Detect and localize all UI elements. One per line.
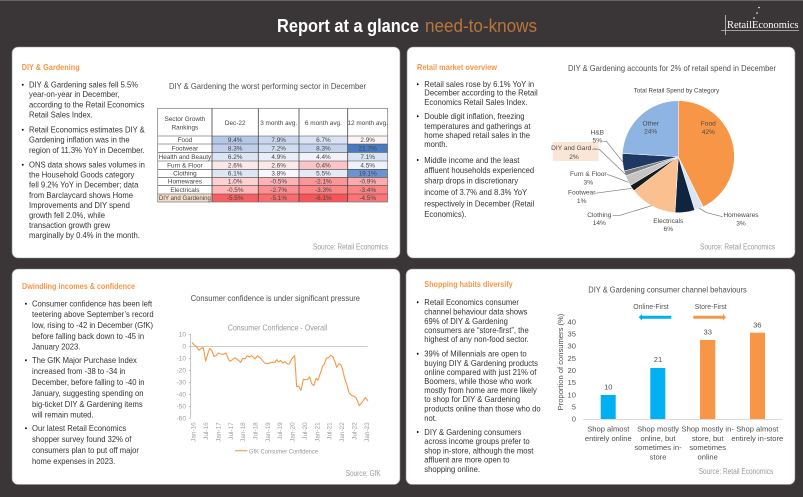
- table: sector growth rankings: 7.2%: [271, 145, 286, 152]
- text block: confidence bullets: teetering above September’s record: [32, 310, 154, 319]
- text block: DIY & Gardening bullets: growth fell 2.0%, while: [29, 210, 105, 220]
- line chart: GfK consumer confidence: -30: [176, 380, 186, 387]
- pie chart: total retail spend by category: 24%: [644, 128, 657, 136]
- text block: shopping habits bullets: channel behaviour data shows: [424, 307, 528, 317]
- table: sector growth rankings: -3.4%: [359, 187, 376, 194]
- table: sector growth rankings: 19.1%: [359, 170, 377, 178]
- text block: shopping habits bullets: DIY & Gardening consumers: [424, 427, 521, 437]
- table: sector growth rankings: Homewares: [168, 179, 202, 186]
- text block: shopping habits bullets: shop in-store, although the most: [424, 446, 534, 456]
- bar chart: channel behaviours: store, but: [692, 434, 724, 443]
- text block: confidence bullets: The GfK Major Purchase Index: [32, 356, 137, 365]
- line chart: GfK consumer confidence: Jul-18: [252, 422, 260, 440]
- text block: retail market bullets: home shaped retail sales in the: [424, 131, 530, 140]
- heading: Dwindling incomes & confidence: Dwindling incomes & confidence: [22, 281, 135, 291]
- line chart: GfK consumer confidence: -50: [176, 404, 186, 411]
- pie chart: total retail spend by category: 2%: [569, 154, 579, 161]
- text block: DIY & Gardening bullets: from Barclaycard shows Home: [29, 190, 133, 200]
- text block: confidence bullets: [25, 299, 154, 466]
- heading: DIY & Gardening: DIY & Gardening: [22, 62, 80, 72]
- text block: DIY & Gardening bullets: the Household Goods category: [29, 170, 135, 180]
- bar chart: channel behaviours: entirely in-store: [731, 434, 783, 443]
- table: sector growth rankings: 8.3%: [316, 145, 331, 152]
- text block: shopping habits bullets: highest of any non-food sector.: [424, 335, 529, 344]
- logo: Retail Economics: [721, 7, 799, 35]
- logo: Retail Economics: RetailEconomics: [727, 19, 798, 31]
- bar chart: channel behaviours: 30: [568, 342, 576, 351]
- text block: DIY & Gardening bullets: ONS data shows sales volumes in: [29, 160, 145, 170]
- text block: shopping habits bullets: 69% of DIY & Gardening: [424, 316, 508, 326]
- text block: confidence bullets: before falling back down to -45 in: [32, 331, 144, 341]
- heading: Shopping habits diversify: Shopping habits diversify: [424, 279, 513, 289]
- text block: confidence bullets: consumers plan to put off major: [32, 445, 139, 455]
- table: sector growth rankings: 4.9%: [271, 154, 286, 161]
- bar chart: channel behaviours: 33: [703, 327, 712, 336]
- table: sector growth rankings: 9.4%: [228, 137, 243, 144]
- table: sector growth rankings: Footwear: [172, 145, 199, 152]
- table: sector growth rankings: Rankings: [172, 124, 198, 132]
- table: sector growth rankings: -0.5%: [227, 187, 244, 194]
- text block: shopping habits bullets: buying DIY & Gardening products: [424, 358, 538, 368]
- text block: shopping habits bullets: [417, 298, 541, 474]
- pie chart: total retail spend by category: 14%: [593, 220, 606, 227]
- table: sector growth rankings: -3.3%: [315, 187, 332, 194]
- text block: DIY & Gardening bullets: DIY & Gardening sales fell 5.5%: [29, 80, 138, 90]
- bar chart: channel behaviours: Shop almost: [736, 425, 779, 434]
- bar chart: channel behaviours: 10: [568, 390, 576, 399]
- table: sector growth rankings: 7.9%: [271, 137, 286, 144]
- bar chart: channel behaviours: 35: [568, 330, 576, 338]
- text block: retail market bullets: month.: [424, 140, 448, 149]
- text block: shopping habits bullets: Retail Economics consumer: [424, 298, 519, 307]
- pie chart: total retail spend by category: DIY and Gard...: [551, 145, 597, 152]
- table: sector growth rankings: Clothing: [173, 170, 197, 178]
- text block: DIY & Gardening bullets: year-on-year in December,: [29, 90, 119, 99]
- pie chart: total retail spend by category: Homewares: [723, 212, 759, 219]
- bar chart: channel behaviours: sometimes: [689, 443, 726, 452]
- table: sector growth rankings: 6.1%: [228, 170, 243, 178]
- text block: DIY & Gardening bullets: transaction growth grew: [29, 221, 110, 230]
- line chart: GfK consumer confidence: Jul-20: [302, 422, 309, 440]
- text block: DIY & Gardening bullets: Gardening inflation was in the: [29, 135, 130, 145]
- chart title: consumer confidence: Consumer confidence is under significant pressure: [191, 293, 360, 303]
- text block: retail market bullets: affluent households experienced: [424, 166, 534, 175]
- table: sector growth rankings: 2.6%: [228, 162, 243, 169]
- text block: retail market bullets: Economics).: [424, 209, 466, 219]
- bar chart: channel behaviours: [556, 313, 783, 461]
- table: sector growth rankings: 21.7%: [359, 145, 377, 152]
- text block: confidence bullets: increased from -38 to -34 in: [32, 366, 125, 376]
- chart title: worst performing sector: DIY & Gardening the worst performing sector in December: [169, 81, 366, 91]
- line chart: GfK consumer confidence: -10: [176, 356, 186, 363]
- text block: confidence bullets: big-ticket DIY & Gardening items: [32, 399, 143, 409]
- text block: DIY & Gardening bullets: Retail Economics estimates DIY &: [29, 125, 145, 135]
- text block: confidence bullets: Our latest Retail Economics: [32, 424, 126, 433]
- line chart: GfK consumer confidence: 10: [179, 332, 186, 339]
- text block: DIY & Gardening bullets: [22, 80, 145, 240]
- table: sector growth rankings: 4.5%: [360, 162, 375, 169]
- text block: retail market bullets: Double digit inflation, freezing: [424, 112, 525, 121]
- bar chart: channel behaviours: Shop mostly: [637, 425, 679, 434]
- text block: shopping habits bullets: Boomers, while those who work: [424, 377, 533, 386]
- text block: confidence bullets: shopper survey found 32% of: [32, 434, 132, 444]
- text block: confidence bullets: low, rising to -42 in December (GfK): [32, 320, 153, 330]
- table: sector growth rankings: -0.5%: [270, 179, 287, 186]
- text block: shopping habits bullets: online compared with just 21% of: [424, 368, 537, 377]
- chart title: share of retail spend: DIY & Gardening accounts for 2% of retail spend in December: [568, 63, 776, 73]
- text block: retail market bullets: [417, 80, 538, 219]
- arrow: online-first: Online-First: [633, 302, 669, 311]
- text block: confidence bullets: will remain muted.: [31, 410, 94, 420]
- bar chart: channel behaviours: 15: [568, 378, 576, 387]
- table: sector growth rankings: 2.6%: [271, 162, 286, 169]
- arrow: store-first: [693, 302, 727, 321]
- text block: shopping habits bullets: consumers are “store-first”, the: [424, 325, 529, 335]
- pie chart: total retail spend by category: 3%: [736, 220, 746, 228]
- table: sector growth rankings: -2.1%: [315, 179, 332, 186]
- panel: Retail market overview: [407, 47, 795, 258]
- text block: retail market bullets: Middle income and the least: [424, 155, 520, 165]
- table: sector growth rankings: 2.9%: [360, 137, 375, 144]
- line chart: GfK consumer confidence: -60: [176, 416, 186, 423]
- table: sector growth rankings: 6.2%: [228, 154, 243, 161]
- bar chart: channel behaviours: entirely online: [585, 434, 632, 443]
- bar chart: channel behaviours: Shop mostly in-: [682, 425, 734, 434]
- pie chart: total retail spend by category: Furn & Floor: [570, 171, 607, 178]
- bar chart: channel behaviours: sometimes in-: [634, 443, 682, 452]
- text block: shopping habits bullets: not.: [424, 413, 437, 423]
- pie chart: total retail spend by category: Total Retail Spend by Category: [634, 88, 720, 94]
- table: sector growth rankings: [158, 108, 388, 202]
- text block: shopping habits bullets: affluent are more open to: [424, 455, 510, 465]
- text block: confidence bullets: December, before falling to -40 in: [32, 377, 145, 387]
- bar chart: channel behaviours: 5: [572, 402, 576, 412]
- bar chart: channel behaviours: online: [698, 452, 718, 461]
- text block: shopping habits bullets: across income groups prefer to: [424, 437, 530, 446]
- table: sector growth rankings: 1.0%: [228, 179, 243, 186]
- title: Report at a glance: [277, 16, 419, 36]
- text block: retail market bullets: sharp drops in discretionary: [424, 176, 519, 186]
- source note: Source: GfK: [346, 469, 381, 478]
- bar chart: channel behaviours: 36: [753, 321, 762, 330]
- pie chart: total retail spend by category: 6%: [664, 226, 673, 233]
- table: sector growth rankings: 6 month avg.: [305, 120, 342, 127]
- table: sector growth rankings: -2.7%: [270, 187, 287, 194]
- text block: DIY & Gardening bullets: fell 9.2% YoY in December; data: [29, 180, 139, 190]
- line chart: GfK consumer confidence: Jan-20: [290, 422, 297, 442]
- line chart: GfK consumer confidence: Jan-22: [339, 422, 346, 442]
- pie chart: total retail spend by category: 5%: [593, 138, 602, 144]
- text block: retail market bullets: December according to the Retail: [424, 88, 538, 98]
- line chart: GfK consumer confidence: Consumer Confidence - Overall: [228, 323, 327, 332]
- panel: DIY & Gardening: [12, 47, 400, 258]
- table: sector growth rankings: 7.1%: [360, 154, 375, 161]
- line chart: GfK consumer confidence: Jul-22: [351, 422, 358, 440]
- pie chart: total retail spend by category: Other: [642, 120, 660, 128]
- table: sector growth rankings: Health and Beauty: [159, 154, 212, 161]
- text block: DIY & Gardening bullets: marginally by 0.4% in the month.: [29, 231, 140, 240]
- pie chart: total retail spend by category: Clothing: [587, 212, 612, 219]
- table: sector growth rankings: 4.4%: [316, 154, 331, 161]
- table: sector growth rankings: 12 month avg.: [347, 120, 388, 127]
- line chart: GfK consumer confidence: Jul-19: [277, 422, 284, 440]
- bar chart: channel behaviours: 25: [568, 354, 576, 363]
- arrow: online-first: [633, 302, 671, 321]
- title: [277, 16, 537, 36]
- line chart: GfK consumer confidence: Jan-17: [215, 422, 222, 442]
- pie chart: total retail spend by category: [551, 88, 759, 233]
- text block: shopping habits bullets: shopping online.: [424, 464, 480, 474]
- text block: DIY & Gardening bullets: region of 11.3% YoY in December.: [29, 145, 145, 155]
- pie chart: total retail spend by category: Electricals: [653, 218, 684, 225]
- source note: Source: Retail Economics: [313, 242, 388, 252]
- table: sector growth rankings: -0.9%: [359, 179, 376, 186]
- line chart: GfK consumer confidence: 0: [182, 344, 186, 351]
- bar chart: channel behaviours: Proportion of consumers (%): [556, 313, 565, 410]
- table: sector growth rankings: Electricals: [170, 187, 199, 194]
- text block: confidence bullets: home expenses in 2023.: [32, 456, 115, 466]
- table: sector growth rankings: -6.1%: [315, 195, 332, 202]
- bar chart: channel behaviours: 0: [572, 415, 576, 424]
- table: sector growth rankings: -4.5%: [359, 195, 376, 202]
- heading: Retail market overview: Retail market overview: [417, 62, 497, 72]
- line chart: GfK consumer confidence: [176, 323, 371, 455]
- line chart: GfK consumer confidence: Jan-21: [314, 422, 321, 442]
- line chart: GfK consumer confidence: Jan-23: [364, 422, 371, 442]
- table: sector growth rankings: 8.3%: [228, 145, 243, 152]
- source note: Source: Retail Economics: [700, 242, 775, 252]
- pie chart: total retail spend by category: 42%: [702, 129, 715, 136]
- pie chart: total retail spend by category: Footwear: [568, 190, 596, 196]
- line chart: GfK consumer confidence: -40: [176, 392, 186, 399]
- line chart: GfK consumer confidence: -20: [176, 368, 186, 375]
- bar chart: channel behaviours: online, but: [640, 434, 676, 443]
- bar chart: channel behaviours: 40: [568, 317, 576, 326]
- text block: confidence bullets: January, suggesting spending on: [32, 389, 144, 398]
- line chart: GfK consumer confidence: Jul-16: [203, 422, 210, 440]
- bar chart: channel behaviours: store: [650, 452, 666, 461]
- pie chart: total retail spend by category: 1%: [577, 198, 587, 205]
- text block: DIY & Gardening bullets: Retail Sales Index.: [29, 110, 93, 120]
- table: sector growth rankings: 3.8%: [271, 170, 286, 178]
- table: sector growth rankings: 6.7%: [316, 137, 331, 144]
- line chart: GfK consumer confidence: Jan-19: [265, 422, 272, 442]
- table: sector growth rankings: Furn & Floor: [167, 162, 204, 169]
- panel: Shopping habits diversify: [406, 269, 795, 484]
- line chart: GfK consumer confidence: GfK Consumer Confidence: [249, 448, 318, 455]
- text block: retail market bullets: income of 3.7% and 8.3% YoY: [424, 188, 528, 197]
- text block: shopping habits bullets: 39% of Millennials are open to: [424, 349, 527, 359]
- line chart: GfK consumer confidence: Jul-21: [327, 422, 334, 440]
- chart title: channel behaviours: DIY & Gardening consumer channel behaviours: [588, 285, 747, 295]
- pie chart: total retail spend by category: H&B: [591, 130, 605, 136]
- text block: retail market bullets: respectively in December (Retail: [424, 199, 534, 209]
- text block: retail market bullets: Retail sales rose by 6.1% YoY in: [424, 80, 534, 89]
- bar chart: channel behaviours: 10: [604, 382, 613, 391]
- text block: confidence bullets: January 2023.: [32, 342, 80, 352]
- table: sector growth rankings: 3 month avg.: [260, 120, 297, 127]
- text block: retail market bullets: temperatures and gatherings at: [424, 121, 531, 131]
- table: sector growth rankings: -5.1%: [270, 195, 287, 202]
- line chart: GfK consumer confidence: Jan-16: [191, 422, 198, 442]
- source note: Source: Retail Economics: [699, 467, 773, 476]
- title: need-to-knows: [425, 16, 537, 36]
- line chart: GfK consumer confidence: Jan-18: [240, 422, 247, 442]
- table: sector growth rankings: Food: [178, 137, 193, 144]
- line chart: GfK consumer confidence: Jul-17: [228, 422, 235, 440]
- pie chart: total retail spend by category: Food: [701, 120, 716, 128]
- table: sector growth rankings: DIY and Gardening: [159, 195, 211, 202]
- table: sector growth rankings: Dec-22: [225, 120, 246, 127]
- pie chart: total retail spend by category: 3%: [584, 180, 593, 186]
- panel: Dwindling incomes & confidence: [12, 269, 400, 484]
- bar chart: channel behaviours: 20: [568, 366, 576, 375]
- text block: retail market bullets: Economics Retail Sales Index.: [424, 97, 527, 107]
- table: sector growth rankings: -5.5%: [227, 195, 244, 202]
- table: sector growth rankings: Sector Growth: [164, 116, 206, 123]
- bar chart: channel behaviours: Shop almost: [587, 425, 630, 434]
- text block: shopping habits bullets: products online than those who do: [424, 404, 541, 414]
- text block: DIY & Gardening bullets: according to the Retail Economics: [29, 100, 144, 109]
- text block: shopping habits bullets: mostly from home are more likely: [424, 386, 538, 395]
- bar chart: channel behaviours: 21: [654, 355, 662, 364]
- arrow: store-first: Store-First: [695, 302, 727, 311]
- text block: confidence bullets: Consumer confidence has been left: [32, 299, 153, 309]
- text block: DIY & Gardening bullets: Improvements and DIY spend: [29, 200, 130, 210]
- text block: shopping habits bullets: to shop for DIY & Gardening: [424, 395, 520, 404]
- table: sector growth rankings: 5.5%: [316, 170, 331, 178]
- table: sector growth rankings: 0.4%: [316, 162, 331, 169]
